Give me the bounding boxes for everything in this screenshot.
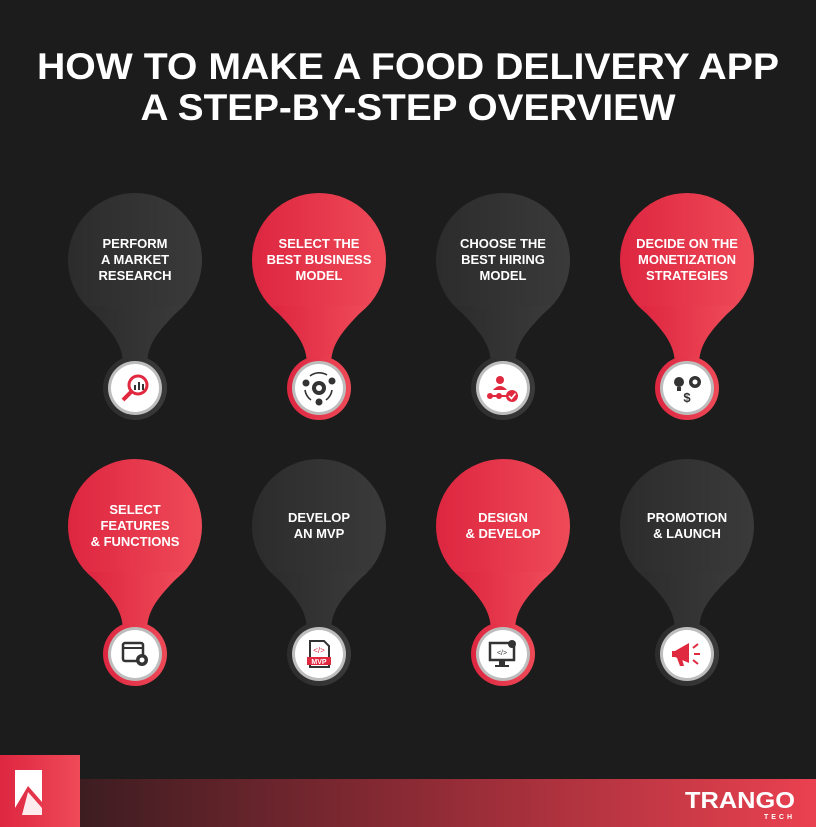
pin 5: features: FEATURES [100,518,170,533]
icon: megaphone [672,643,700,666]
title: HOW TO MAKE A FOOD DELIVERY APP [37,46,779,87]
pin 7: design: & DEVELOP [465,526,541,541]
logo square [0,755,80,827]
pin 1: market research: RESEARCH [99,268,171,283]
pin 7: design: DESIGN [478,510,528,525]
pin 8: promotion [620,459,754,686]
icon: window gear [123,643,148,666]
pin 3: hiring model: MODEL [480,268,527,283]
pin 8: promotion: PROMOTION [647,510,727,525]
pin 8: promotion: & LAUNCH [653,526,721,541]
icon: people check [487,376,518,402]
pin 6: MVP [252,459,386,686]
title [37,46,779,128]
pin 6: MVP: AN MVP [294,526,345,541]
pin 3: hiring model [436,193,570,420]
pin 2: business model: BEST BUSINESS [267,252,372,267]
pin 1: market research: PERFORM [102,236,168,251]
title: A STEP-BY-STEP OVERVIEW [140,87,676,128]
pin 4: monetization: MONETIZATION [638,252,736,267]
icon: gear cycle [302,373,336,406]
pin 2: business model [252,193,386,420]
footer bar [0,779,816,827]
icon: MVP file [307,641,331,667]
pin 3: hiring model: BEST HIRING [461,252,545,267]
pin 5: features [68,459,202,686]
pin 1: market research [68,193,202,420]
icon: MVP file: MVP [311,659,327,666]
brand: TRANGO TECH: TECH [764,814,795,821]
pin 1: market research: A MARKET [101,252,169,267]
icon: magnifier chart [123,376,147,400]
brand: TRANGO TECH [685,787,795,821]
pin 6: MVP: DEVELOP [288,510,350,525]
pin 2: business model: SELECT THE [279,236,360,251]
icon: MVP file: </> [313,646,325,655]
icon: monitor code [490,640,516,667]
icon: bulb gear dollar: $ [683,390,691,405]
icon: monitor code: </> [497,650,507,657]
pin 4: monetization: STRATEGIES [646,268,728,283]
pin 5: features: SELECT [109,502,161,517]
pin 7: design [436,459,570,686]
icon: bulb gear dollar [674,376,701,405]
pin 3: hiring model: CHOOSE THE [460,236,546,251]
pin 4: monetization [620,193,754,420]
brand: TRANGO TECH: TRANGO [685,787,795,813]
pin 4: monetization: DECIDE ON THE [636,236,738,251]
pin 2: business model: MODEL [296,268,343,283]
pin 5: features: & FUNCTIONS [91,534,180,549]
